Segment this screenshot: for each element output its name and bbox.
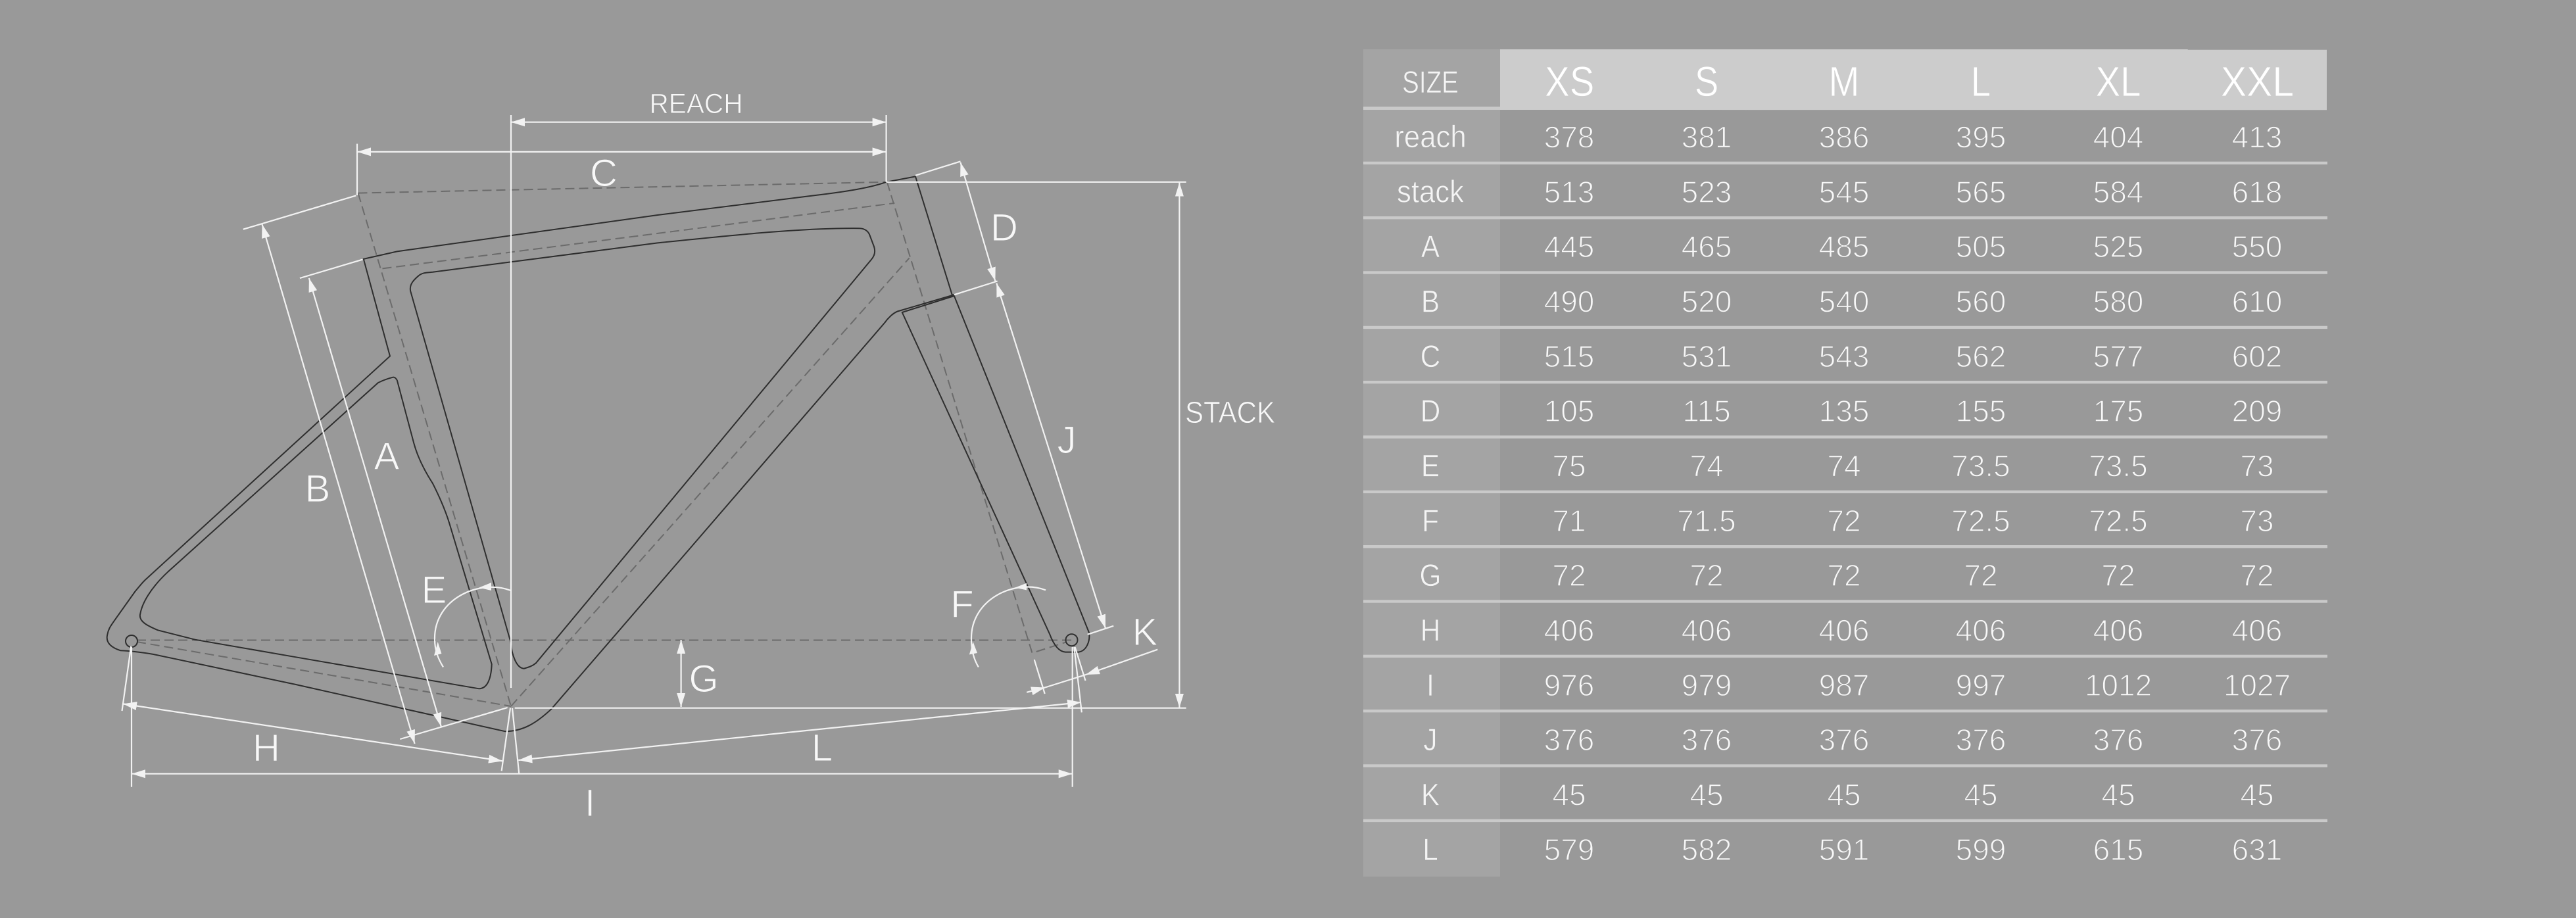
row: F	[1422, 504, 2274, 538]
row: L: 582	[1682, 833, 1732, 867]
row: B: 560	[1956, 284, 2006, 318]
row: E: E	[1421, 450, 1440, 483]
bicycle frame outline	[107, 176, 1089, 731]
size chart table	[1363, 49, 2327, 877]
row: reach: 404	[2093, 120, 2143, 154]
row: E: 73.5	[1951, 448, 2010, 483]
label: I: I	[585, 782, 595, 825]
header: XXL: XXL	[2221, 59, 2294, 106]
row: I: 979	[1682, 668, 1732, 702]
label: B: B	[305, 468, 330, 510]
row: K: 45	[1552, 777, 1586, 811]
label: J: J	[1057, 419, 1076, 462]
row: G	[1420, 558, 2274, 593]
row: D: 105	[1544, 394, 1594, 428]
row: B	[1421, 284, 2282, 319]
row: stack: 584	[2093, 175, 2143, 209]
row: E	[1421, 448, 2274, 483]
row: L: 591	[1819, 833, 1869, 867]
row: stack: stack	[1397, 174, 1464, 209]
row: H: 406	[1956, 613, 2006, 647]
row: I	[1426, 668, 2291, 702]
row: reach: 381	[1682, 120, 1732, 154]
label: F: F	[950, 583, 974, 626]
row: D: 135	[1819, 394, 1869, 428]
row: E: 74	[1827, 448, 1861, 483]
row: G: 72	[1689, 558, 1724, 592]
row: I: 976	[1544, 668, 1594, 702]
row: G: 72	[1827, 558, 1861, 592]
row: A	[1421, 230, 2282, 264]
row: H: 406	[2093, 613, 2143, 647]
row: reach: reach	[1394, 120, 1467, 154]
label: C: C	[590, 152, 618, 195]
label column background	[1363, 49, 1500, 877]
row: B: 580	[2093, 284, 2143, 318]
row: F: 72.5	[1951, 504, 2010, 538]
row: H: 406	[1682, 613, 1732, 647]
row: D: 155	[1956, 394, 2006, 428]
header: SIZE: SIZE	[1402, 65, 1459, 100]
row: G: 72	[1552, 558, 1586, 592]
row: F: 72.5	[2089, 504, 2148, 538]
row: C	[1421, 339, 2282, 374]
row: reach: 378	[1544, 120, 1594, 154]
row: reach: 413	[2232, 120, 2282, 154]
row: H	[1421, 613, 2282, 648]
row: F: 72	[1827, 504, 1861, 538]
row: D: 175	[2093, 394, 2143, 428]
row: L: L	[1422, 833, 1438, 867]
row: K: 45	[2101, 777, 2135, 811]
row: I: 1027	[2224, 668, 2291, 702]
row: B: B	[1421, 285, 1440, 319]
row: C: 543	[1819, 339, 1869, 374]
row: reach: 386	[1819, 120, 1869, 154]
row: G: 72	[2240, 558, 2274, 592]
frame geometry diagram	[107, 89, 1275, 825]
row: G: G	[1420, 559, 1441, 593]
row: E: 75	[1552, 448, 1586, 483]
row: A: 550	[2232, 230, 2282, 264]
row: reach	[1394, 120, 2282, 154]
dashed centre lines of the frame	[137, 182, 1071, 706]
row: C: 531	[1682, 339, 1732, 374]
row: B: 520	[1682, 284, 1732, 318]
row: K: 45	[2240, 777, 2274, 811]
header background	[1500, 49, 2327, 110]
dimension lines and arrows	[122, 115, 1186, 787]
label: E: E	[422, 569, 447, 612]
row: stack: 523	[1682, 175, 1732, 209]
row: H: 406	[1544, 613, 1594, 647]
row: K	[1421, 777, 2274, 812]
row: C: 562	[1956, 339, 2006, 374]
header: XS: XS	[1545, 58, 1594, 105]
label: REACH: REACH	[650, 89, 743, 120]
row: J: J	[1423, 723, 1438, 758]
row: A: 505	[1956, 230, 2006, 264]
row: A: 485	[1819, 230, 1869, 264]
label: K: K	[1132, 611, 1158, 654]
label: G: G	[689, 658, 719, 700]
row: K: K	[1421, 779, 1440, 812]
row: H: 406	[1819, 613, 1869, 647]
front axle	[1065, 634, 1077, 646]
header: XL: XL	[2096, 58, 2141, 105]
label: A: A	[374, 435, 400, 478]
row: stack: 545	[1819, 175, 1869, 209]
row: D	[1421, 394, 2282, 429]
row: D: 115	[1682, 394, 1731, 428]
row: I: 1012	[2085, 668, 2152, 702]
row: J: 376	[1682, 723, 1732, 757]
row: J: 376	[1956, 723, 2006, 757]
header row	[1402, 49, 2327, 110]
row: L	[1422, 833, 2282, 867]
row: L: 615	[2093, 833, 2143, 867]
row: K: 45	[1689, 777, 1724, 811]
row: E: 73.5	[2089, 448, 2148, 483]
row: E: 73	[2240, 448, 2274, 483]
rear axle	[126, 635, 137, 647]
row: L: 579	[1544, 833, 1594, 867]
row: G: 72	[1964, 558, 1998, 592]
row: F: F	[1422, 504, 1439, 538]
row: J: 376	[2093, 723, 2143, 757]
row: B: 610	[2232, 284, 2282, 318]
row: stack: 565	[1956, 175, 2006, 209]
row: A: 525	[2093, 230, 2143, 264]
row: stack: 618	[2232, 175, 2282, 209]
header: M: M	[1829, 58, 1859, 105]
row: D: D	[1421, 395, 1440, 429]
header: L: L	[1971, 58, 1991, 105]
row: B: 540	[1819, 284, 1869, 318]
header: S: S	[1695, 58, 1718, 105]
row: J: 376	[1819, 723, 1869, 757]
row: L: 631	[2232, 833, 2282, 867]
label: STACK: STACK	[1185, 395, 1275, 429]
row: H: H	[1421, 614, 1440, 648]
row: B: 490	[1544, 284, 1594, 318]
row separator rules	[1363, 107, 2327, 822]
row: reach: 395	[1956, 120, 2006, 154]
row: A: 465	[1682, 230, 1732, 264]
row: K: 45	[1964, 777, 1998, 811]
row: C: C	[1421, 340, 1440, 374]
row: C: 577	[2093, 339, 2143, 374]
row: J: 376	[2232, 723, 2282, 757]
row: stack	[1397, 174, 2282, 209]
label: L: L	[812, 727, 833, 769]
row: C: 515	[1544, 339, 1594, 374]
angle arrow F	[969, 583, 1046, 667]
row: I: 997	[1956, 668, 2006, 702]
row: D: 209	[2232, 394, 2282, 428]
row: J: 376	[1544, 723, 1594, 757]
row: H: 406	[2232, 613, 2282, 647]
row: F: 71	[1552, 504, 1586, 538]
angle arrow E	[434, 583, 511, 667]
row: L: 599	[1956, 833, 2006, 867]
row: C: 602	[2232, 339, 2282, 374]
row: J	[1423, 723, 2282, 758]
row: I: I	[1426, 669, 1434, 702]
row: A: A	[1421, 230, 1440, 264]
row: A: 445	[1544, 230, 1594, 264]
label: H: H	[253, 727, 280, 769]
row: I: 987	[1819, 668, 1869, 702]
row: G: 72	[2101, 558, 2135, 592]
row: F: 71.5	[1677, 504, 1736, 538]
row: K: 45	[1827, 777, 1861, 811]
label: D: D	[990, 206, 1018, 249]
row: E: 74	[1689, 448, 1724, 483]
row: F: 73	[2240, 504, 2274, 538]
row: stack: 513	[1544, 175, 1594, 209]
